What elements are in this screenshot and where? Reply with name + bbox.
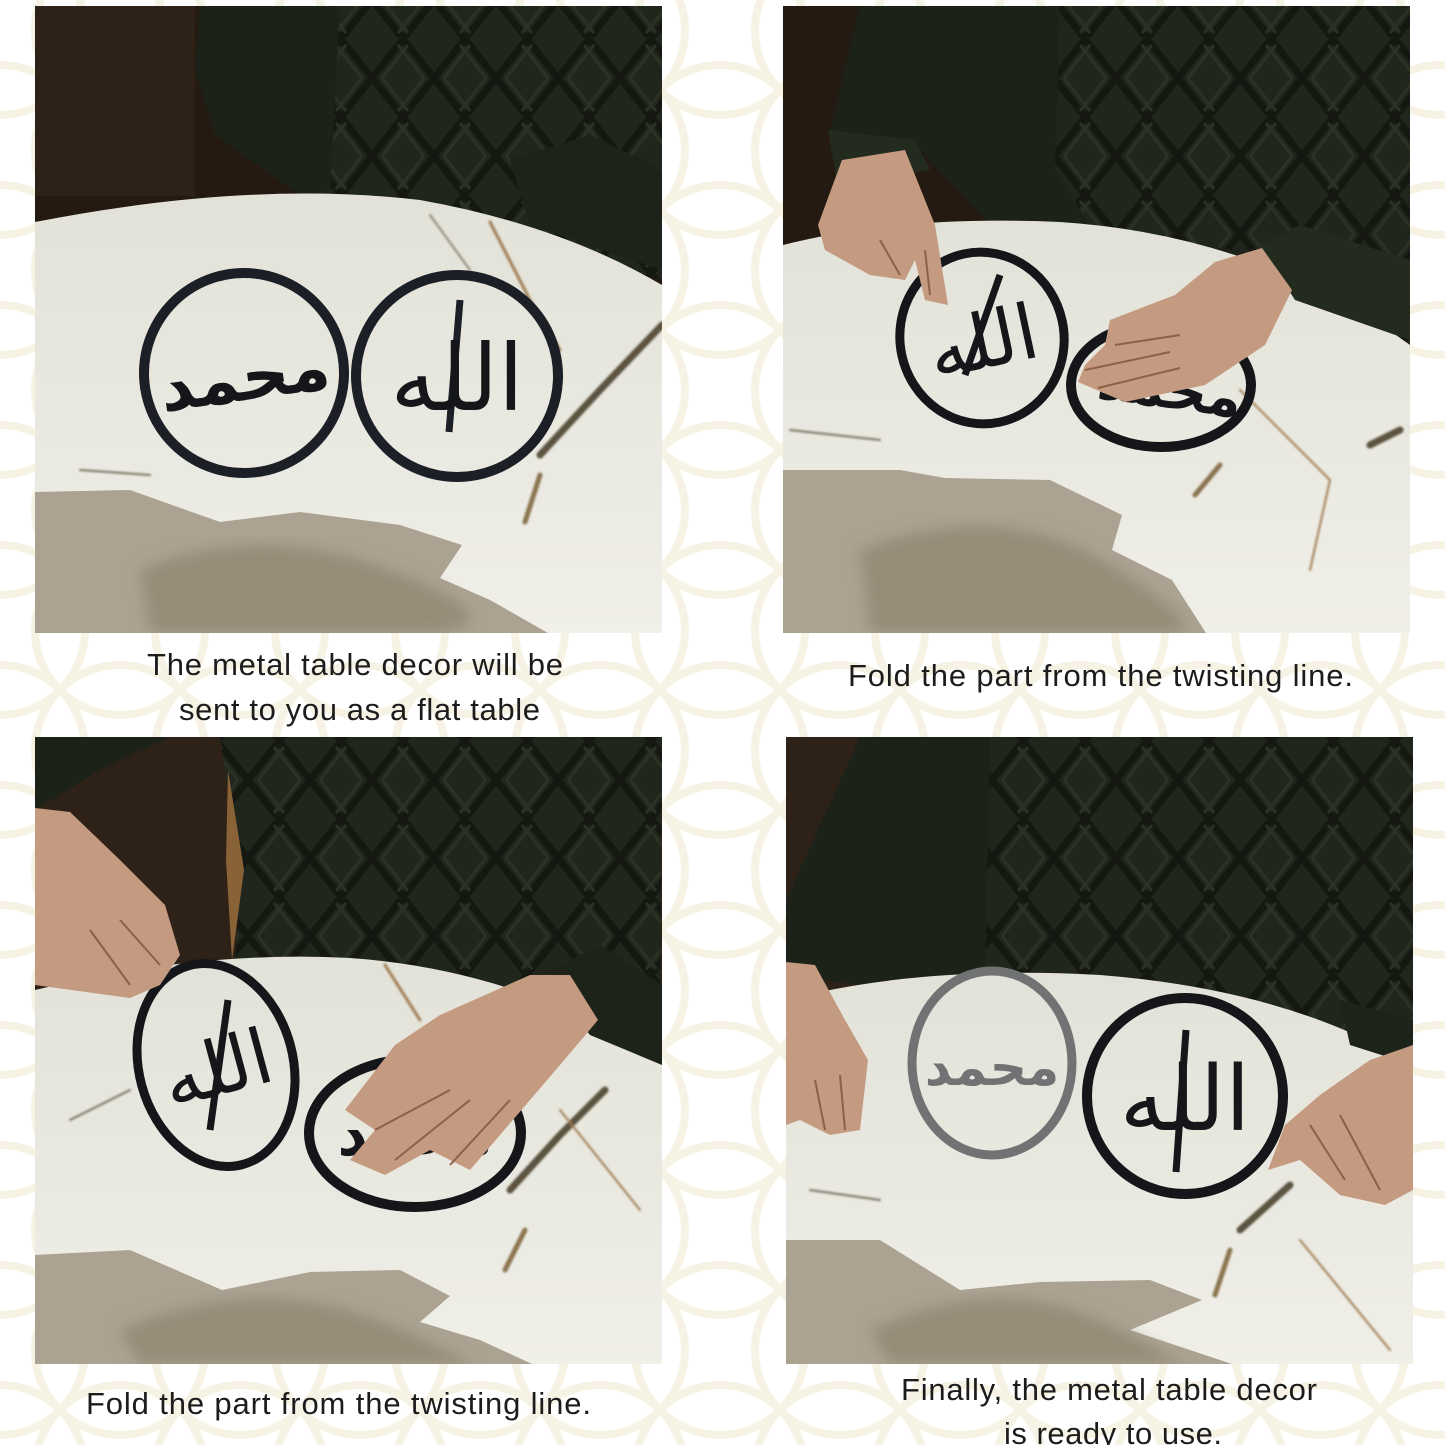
marble veins	[80, 215, 662, 522]
marble veins	[70, 965, 640, 1270]
calligraphy: Allah: الله	[1120, 1047, 1250, 1152]
metal decor: Muhammad and Allah circles	[144, 273, 558, 477]
icon: right hand pressing	[1078, 248, 1292, 402]
chair edge	[226, 770, 244, 960]
calligraphy: Allah: الله	[390, 325, 524, 432]
cuff left	[828, 130, 930, 180]
metal decor: standing circles	[912, 971, 1283, 1194]
caption: step 4: Finally, the metal table decor	[901, 1372, 1317, 1407]
metal decor: folded circles	[115, 946, 521, 1207]
caption: step 2: Fold the part from the twisting line.	[848, 658, 1353, 693]
lower beige marble	[786, 1240, 1232, 1364]
icon: left hand pinching	[818, 150, 948, 305]
caption: step 1: sent to you as a flat table	[179, 692, 540, 727]
caption: step 3: Fold the part from the twisting line.	[86, 1386, 591, 1421]
calligraphy: Muhammad: محمد	[155, 327, 335, 427]
cuff right	[1342, 1000, 1413, 1056]
marble veins	[790, 390, 1400, 570]
marble table	[35, 194, 662, 633]
icon: left hand pinching	[35, 808, 180, 998]
cuff	[572, 946, 662, 1065]
calligraphy: Allah, tilted: الله	[152, 1011, 282, 1126]
marble table	[35, 957, 662, 1364]
cuff right	[1260, 225, 1410, 340]
stem of Allah lettering	[449, 300, 460, 432]
sweater	[831, 10, 984, 217]
marble table	[783, 221, 1410, 633]
marble veins	[810, 1185, 1390, 1350]
metal decor: folded circles	[884, 237, 1251, 447]
lower beige marble	[783, 470, 1206, 633]
panel: step 2 photo	[783, 6, 1410, 633]
icon: right hand	[1268, 1045, 1413, 1205]
sweater	[220, 737, 662, 986]
caption: step 1	[147, 647, 563, 727]
caption: step 1: The metal table decor will be	[147, 647, 563, 682]
calligraphy: Muhammad, grey: محمد	[925, 1038, 1059, 1098]
sleeve cuff	[510, 135, 662, 270]
lower beige marble	[35, 490, 548, 633]
metal decor: folded circles: محمد	[1094, 347, 1246, 432]
stem of Allah lettering	[1176, 1030, 1186, 1172]
sweater	[986, 737, 1413, 1031]
icon: right hand pressing	[345, 975, 598, 1175]
calligraphy: Allah, tilted: الله	[920, 286, 1046, 396]
panel: step 3 photo	[35, 737, 662, 1368]
metal decor: folded circles: محمد	[337, 1100, 493, 1170]
lower beige marble	[35, 1250, 532, 1364]
panel: step 1 photo	[35, 6, 662, 633]
sweater	[311, 6, 662, 280]
stem of Allah lettering	[965, 275, 1000, 375]
marble table	[786, 973, 1413, 1364]
icon: left hand	[786, 962, 868, 1135]
panel: step 4 photo	[786, 737, 1413, 1368]
caption: step 4	[901, 1372, 1317, 1445]
stem of Allah lettering	[210, 1000, 228, 1130]
